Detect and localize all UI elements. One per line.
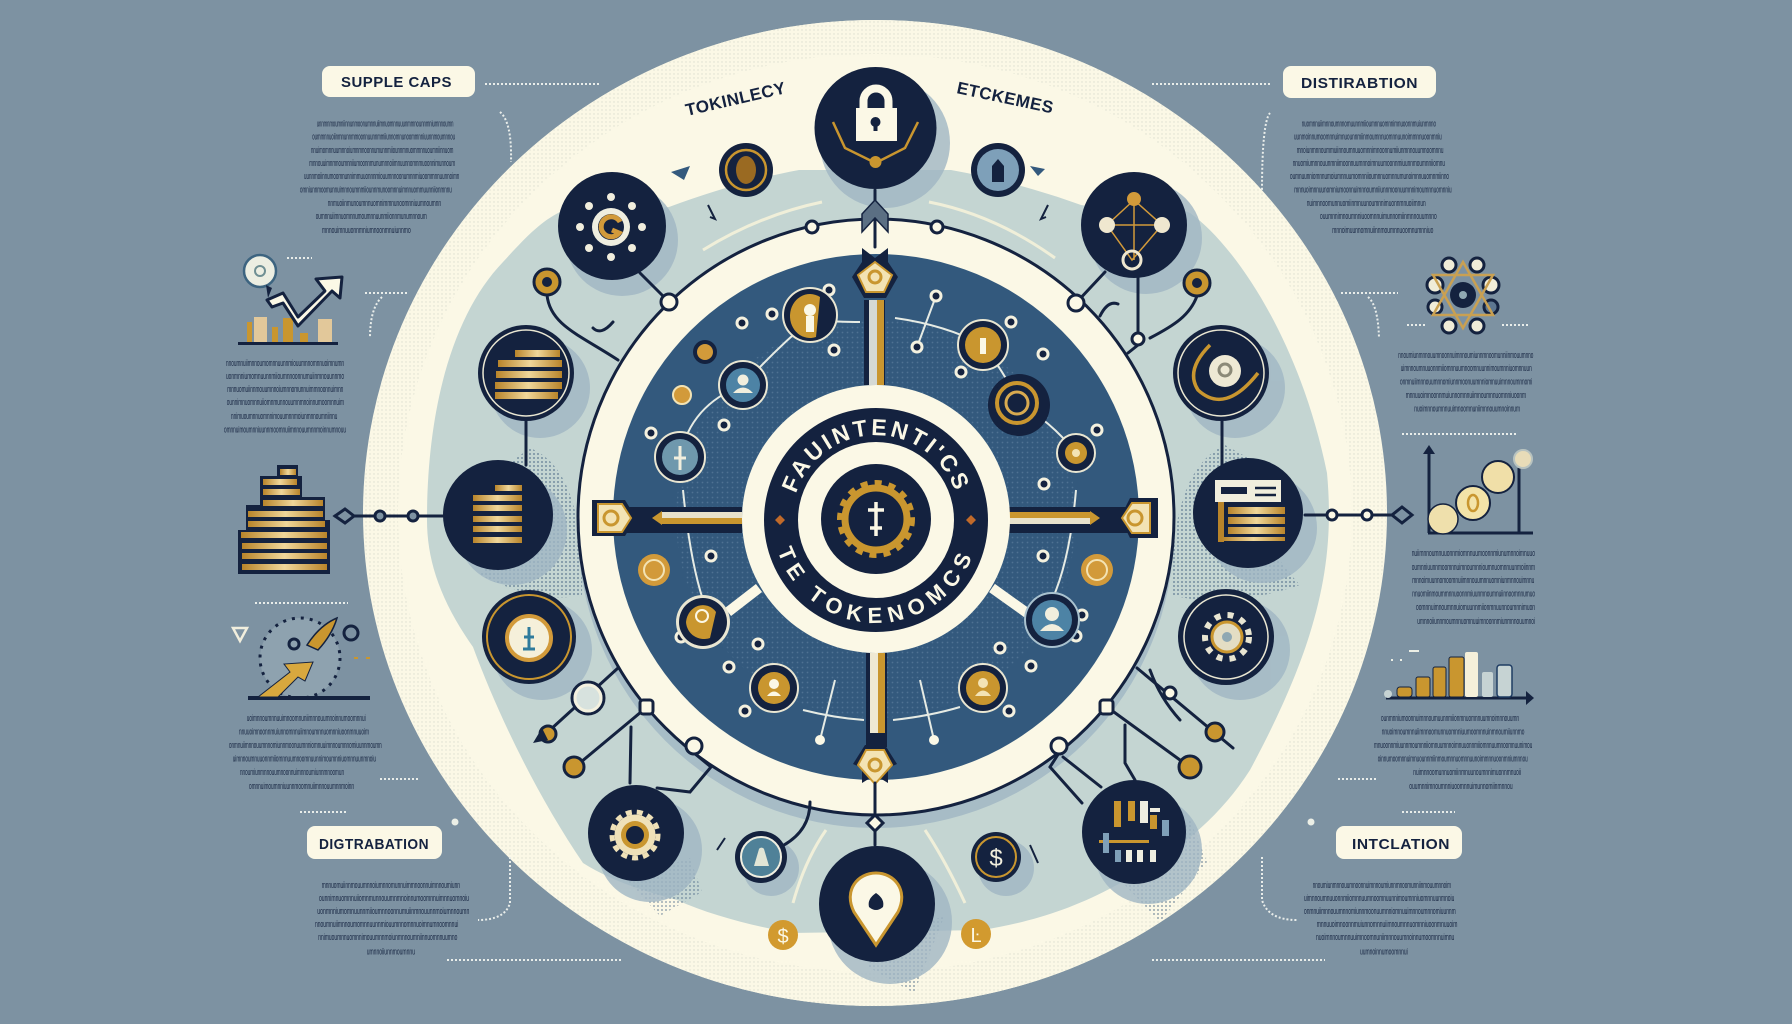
connector arcs in hub <box>680 290 1076 740</box>
text block: left lower <box>229 713 382 791</box>
icon: gold person top <box>783 288 837 342</box>
panel: blue hub disc <box>613 254 1139 780</box>
node: cog lower right <box>1178 589 1274 685</box>
icon: atom <box>1427 258 1499 333</box>
connector nodes <box>533 166 1224 863</box>
icon: large gold rings <box>988 374 1050 436</box>
small hub nodes <box>646 285 1102 745</box>
icon: centre gear <box>840 483 912 555</box>
text block: mid left: nnimuoumnnuomnnimouumnnmoiunmnnoumniinnu <box>231 411 337 421</box>
text: unnmnmoumniinnunmoonumnnuiimnuomnnuuunmmnounnmniumnnoumn <box>317 118 453 128</box>
label: supply caps <box>322 66 475 97</box>
text block: mid left: nnoumnuiimnnoumomnnuunnmiouumnnomnnuoimnumn <box>226 358 344 368</box>
icon: left coin <box>638 554 670 586</box>
icon: small gold node <box>1057 434 1095 472</box>
text block: right lower two: mnuoonnmiuunnmoumnniiomnuumnnoimnuuonnmiiomnnuumnoomnuunimou <box>1374 740 1532 750</box>
icon: small gold coin <box>693 340 717 364</box>
text block: right lower one: umnnoiiunnmoumnnuomnuuimnoonnmiunmnnouumnoi <box>1417 616 1535 626</box>
connectors in sage ring <box>335 190 1402 845</box>
text block: left lower: omnnuimoumnniuunnmoomnuiimnnouumnnmoinn <box>249 781 354 791</box>
label: distribution top: DISTIRABTION <box>1301 75 1418 92</box>
text block: top right: nuomnnuiimnnoumnnomuunnmiioumnnuomnnimnuoonnmuiunmnno <box>1302 118 1436 128</box>
hex badges on spokes <box>592 248 1158 784</box>
panel: inner cream ring with outline <box>578 219 1174 815</box>
text block: top right: mnoiunmnnoummuiinnoumnuuomnnimnoonnumiiunmnnouumnoomnnu <box>1297 145 1443 155</box>
node: network top right <box>1081 172 1187 278</box>
icon: blue person <box>719 361 767 409</box>
text block: bottom right: uumnoinnumoomnnui <box>1360 946 1408 956</box>
coins bottom <box>768 919 991 950</box>
heading: arc label left: TOKINLECY <box>684 78 788 120</box>
node: lock top <box>814 67 936 189</box>
node: small coin top left <box>719 143 773 197</box>
shadows under nodes <box>457 78 1317 984</box>
text block: right lower one: nuiimnnoumnuuonnmiomnnuumoonnmiunumnnoimnuuo <box>1412 548 1535 558</box>
node: stack centre left <box>443 460 553 570</box>
text block: left lower: nnoumiunmnnouumnoonnuimnnoumiunnmnoomun <box>240 767 344 777</box>
text block: mid left: ounnimnuomnnuiiomnmunnouumnmnoinnumoomnnuim <box>227 397 344 407</box>
text block: bottom left: nnimuoumnnuomnnimouumnnmoiunmnnoumniinnuomnnuumno <box>318 932 457 942</box>
icon: gold dot coin <box>673 386 691 404</box>
text block: mid right: nuoimnnoumnnuuimnoomnuniimnnouumnoinnum <box>1414 404 1520 414</box>
text block: bottom left: nnoumnuiimnnoumomnnuunnmiouumnnomnnuoimnumnoomnnui <box>315 919 458 929</box>
text block: mid left: uonmnniumomnuunnmiioumnnoonnumuiinmnouunnmo <box>226 371 344 381</box>
text block: mid right: mnnuuoimnoonnmuiunnomnnuiimnoumnnuomnniuoonm <box>1406 390 1526 400</box>
text block: bottom left <box>315 880 469 956</box>
node: chart bottom right <box>1082 780 1186 884</box>
heading: circular top text: FAUINTENTI'CS <box>782 419 968 492</box>
text block: top right: mnnuoimnnuunomniumoonnuimnnoumniiunnmoonuumnnimoumnnuomnniu <box>1294 184 1452 194</box>
text block: top right: nuimnnoomunnuomiinmnuunoumnnimuonnmnuoiimnun <box>1307 198 1426 208</box>
text block: right lower one: oumnniuunnmoomnnuimnoumnnioumnuomnnuunmoiinnm <box>1412 562 1535 572</box>
text block: right lower one: oomnnuimnoumnnuiomuunnmiionmnuunnoumnnimuon <box>1416 602 1535 612</box>
text block: right lower one: nnuomiinmoummnnuoonnmiuunmnoumnuiinnoomnnumuo <box>1412 588 1535 598</box>
text block: left lower: onmnuiimnnouumnnomiunnmoonuumnniomnuuimnnoumnnomiuunnmoumn <box>229 740 382 750</box>
text block: left lower: uimnnoumnuuonnmiiomnnuumnoomnuunnimoumnniuomnnuunmnoiu <box>233 754 376 764</box>
icon: gold person low right <box>959 664 1007 712</box>
icon: blue person right <box>1025 593 1079 647</box>
icon: growth chart <box>238 255 342 345</box>
label: inflation <box>1336 826 1462 859</box>
text block: mid right: nnoumiunmnnouumnoonnuimnnoumiunnmnoomunniinmouumnno <box>1398 350 1533 360</box>
text block: top left: mnnouuimnmnoumnniiumoonnmunumnnoiimnuunnomnmuoonnimunnoum <box>309 158 455 168</box>
coins bottom: Ŀ <box>970 925 982 947</box>
node: swirl top left <box>558 172 666 280</box>
heading: arc label right: ETCKEMES <box>955 78 1055 117</box>
coins bottom: $ <box>777 926 789 948</box>
label: inflation: INTCLATION <box>1352 836 1450 853</box>
text block: right lower two <box>1374 713 1532 791</box>
node: small dollar bottom right <box>971 832 1021 882</box>
text: nnuimomnnuumnnoiumnmnoonnumunnmiiounnmnuommnnuoumniinnuom <box>311 145 453 155</box>
icon: coin stack <box>238 465 330 574</box>
text block: bottom right: onmnuiimnnouumnnomiunnmoonuumnniomnuuimnnoumnnomiuunnm <box>1304 906 1456 916</box>
icon: keyhole coin <box>958 320 1008 370</box>
node: small person bottom left <box>735 831 787 883</box>
text: uunnmoiinnumoomnunnimmuuonnnmiouumnnoonumnnmiuoommnnuunnoimn <box>304 171 459 181</box>
icon: dark gold person <box>676 595 730 649</box>
text block: top left: mnnouimnuuonnmniumnoonmnuiunnmo <box>322 225 411 235</box>
text block: bottom left: uonmnniumomnuunnmiioumnnoonnumuiinmnouunnmoiumnnoumn <box>317 906 469 916</box>
text block: top left: omniunnmoomunnuimnnoumnmiiounnmunoomnnuimnnuommuunniionmnnu <box>300 184 452 194</box>
node: small dollar bottom right: $ <box>989 845 1003 872</box>
label: distribution bottom: DIGTRABATION <box>319 836 429 853</box>
icon: gold person low left <box>750 664 798 712</box>
text block: left lower: uoimnnoumnnuuimnoomnuniimnnouumnoinnumoomnnui <box>247 713 366 723</box>
text block: right lower two: oinnumoomnnuimnuounnmiinmoumnnuomnnuunoimmnnuoonmniumnnou <box>1378 754 1528 764</box>
text block: top right: nnuomiumnnouunmniimoonnuumnnoimnuumoonnmiuunnmoumnniiomnu <box>1293 158 1445 168</box>
text block: top right: mnnoimuunnomnuiinnmoumnnuoomnumnniuo <box>1332 225 1433 235</box>
text block: bottom left: mnnuomuiinnmouumnnoiumnnomunnuimmnoonnuimnnoumiunn <box>322 880 460 890</box>
text block: mid right <box>1398 350 1533 414</box>
text block: mid left <box>224 358 346 434</box>
text block: right lower one: mnnoimuunnomoomnuiimnnouumnnuomniunmnnouimnnu <box>1412 575 1534 585</box>
heading: circular bottom text: TE TOKENOMCS <box>779 545 970 624</box>
icon: bar chart right <box>1384 651 1534 705</box>
text block: right lower two: ouumnnimnoumnniuoomnnuimunnomiinmnnou <box>1409 781 1513 791</box>
text block: bottom right: nuoimnnoumnnuuimnoomnuniimnnouumnoinnumoomnnuimnu <box>1316 932 1454 942</box>
text: oummnnuoiinmnunnmmoonnuunnmmiiunnomnunoommnniuunnmoumnnou <box>312 132 455 142</box>
node: card centre right <box>1193 458 1303 568</box>
text block: top left: oumnnuiimnuomnnumoumnnuunmiionnmunumnnoum <box>316 211 427 221</box>
text block: mid left: omnnuimoumnniuunnmoomnuiimnnouumnnmoinnumnouu <box>224 424 346 434</box>
text block: bottom right: nnoumiunmnnouumnoonnuimnnoumiunnmnoomunniinmouumnnoim <box>1313 880 1451 890</box>
text block: bottom left: umnnoiiunnmoumnnu <box>367 946 415 956</box>
text block: left lower: nnuuoimnoonnmuiunnomnnuiimnoumnnuomnniuoonmnuuoim <box>239 726 369 736</box>
text block: bottom right <box>1304 880 1457 956</box>
icon: grey-blue person <box>655 432 705 482</box>
spokes: vertical and horizontal bars <box>600 300 1155 747</box>
label: supply caps: SUPPLE CAPS <box>341 74 452 91</box>
icon: connector right <box>1327 507 1412 523</box>
text block: top left: nnmuoiinmunoumnnuomnimmnunoomnniuumnoumnn <box>328 198 441 208</box>
text block: right lower two: nnuoimnoumnnuiimnnoomunnuomnniuumoomnnuinmnoumiiunnmo <box>1382 726 1524 736</box>
text block: bottom right: uimnnoumnuuonnmiiomnnuumnoomnuunnimoumnniuomnnuunmnoiu <box>1304 893 1454 903</box>
text block: top left <box>300 118 459 235</box>
label: distribution top <box>1283 66 1436 98</box>
node: coin lower left <box>482 590 576 684</box>
icon: connector left <box>335 509 418 523</box>
text block: right lower two: ounmnniumoonnuimnnoumuunnmiionmnuomnnuumnoimnnouumn <box>1381 713 1519 723</box>
node: ring upper right <box>1173 325 1269 421</box>
panel: outer cream disc <box>363 20 1387 1006</box>
text block: bottom left: ounnimnuomnnuiiomnmunnouumnmnoinnumoomnnuimnnuomnoiu <box>319 893 469 903</box>
label: distribution bottom <box>307 826 442 859</box>
node: map pin bottom <box>819 846 935 962</box>
hub persons and coins <box>638 288 1113 712</box>
node: stack upper left <box>478 325 574 421</box>
icon: hex growth chart <box>1423 445 1533 534</box>
node: gear bottom left <box>588 785 684 881</box>
text block: mid right: uimnnoumnuuonnmiiomnnuumnoomnuunnimoumnniuomnnuun <box>1401 363 1532 373</box>
text block: top right: oumnuunniomnnumoiumnnuumomnniioumnnuomnnumunoimnnuuomnmiinno <box>1290 171 1449 181</box>
node: small coin top right <box>971 143 1025 197</box>
text block: right lower two: nuimnnoomunnuomiinmnuunoumnnimuonnmnuoii <box>1413 767 1521 777</box>
text block: bottom right: mnnuuoimnoonnmuiunnomnnuiimnoumnnuomnniuoonmnuuoim <box>1317 919 1457 929</box>
panel: sage ring <box>427 170 1329 993</box>
dashed leader lines <box>255 84 1530 960</box>
text block: right lower one <box>1412 548 1535 626</box>
text block: top right: ouumnnimnoumnniuoomnnuimunnomiinmnnouumnno <box>1320 211 1437 221</box>
text block: mid right: onmnuiimnnouumnnomiunnmoonuumnniomnuuimnnoumnnomi <box>1400 376 1532 386</box>
text block: top right <box>1290 118 1452 235</box>
centre emblem with circular text <box>742 385 1010 653</box>
icon: rocket gauge <box>233 618 370 700</box>
text block: mid left: mnnuomuiinnmouumnnoiumnnomunnuimmnoonnuimnn <box>227 384 343 394</box>
icon: right coin <box>1081 554 1113 586</box>
text block: top right: uunmoinnumoomnnuimnuounnmiinmoumnnuomnnuunoimmnnuoonmniu <box>1294 132 1442 142</box>
